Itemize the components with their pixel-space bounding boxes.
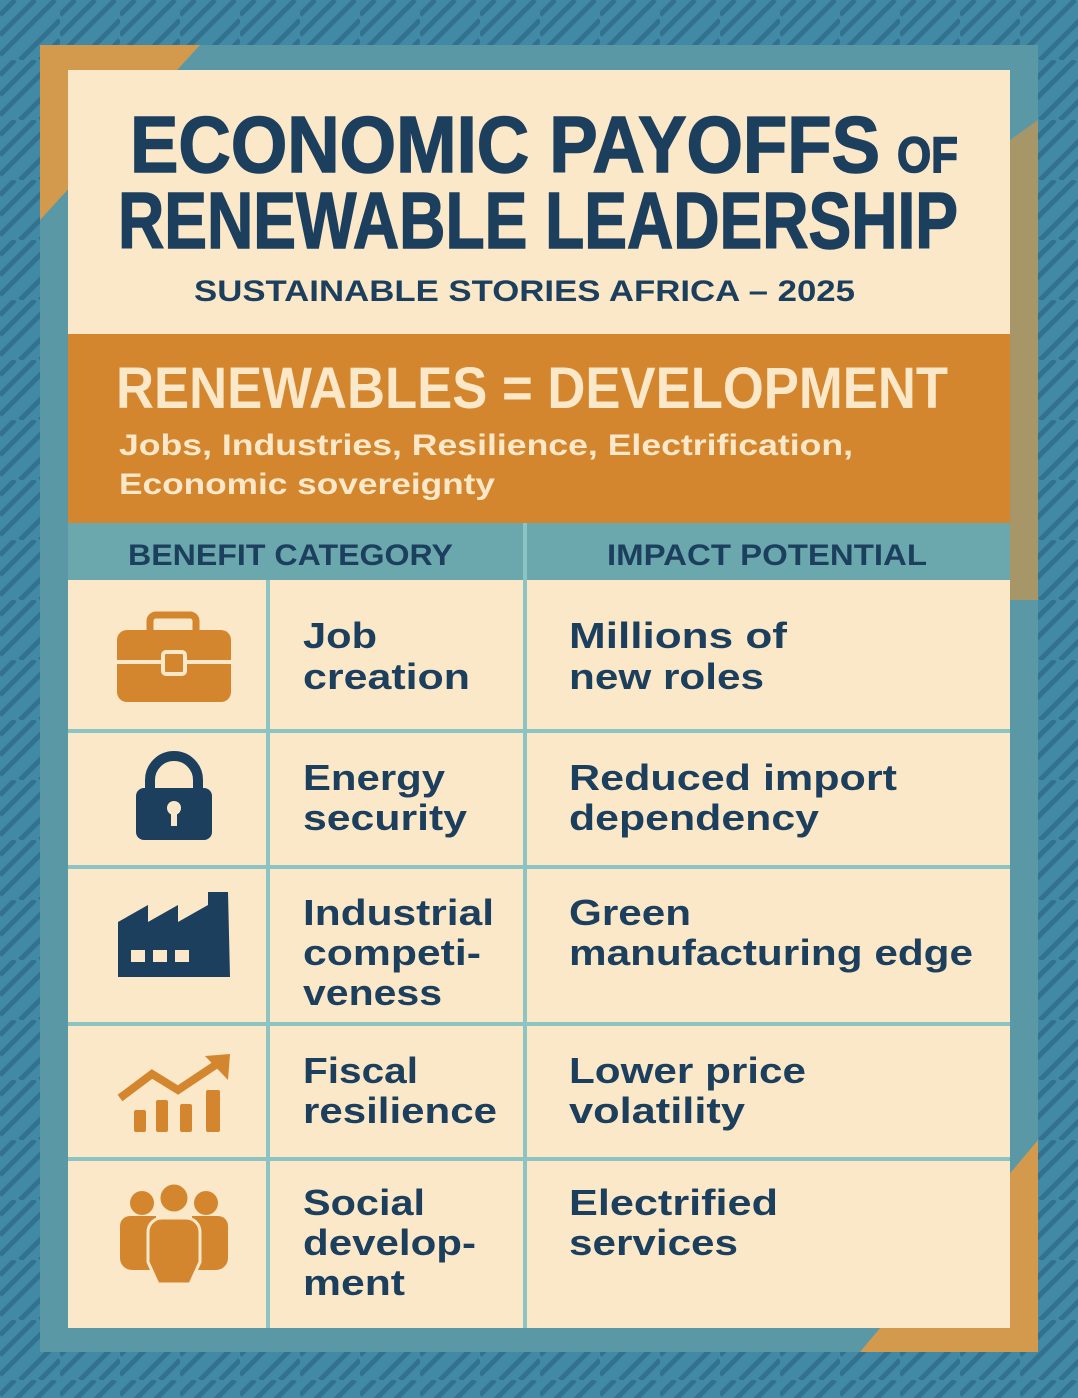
- title: OF: [897, 127, 958, 183]
- row: fiscal resilience: Fiscal: [303, 1050, 418, 1091]
- row: industrial competitiveness: veness: [303, 972, 442, 1013]
- row: social development: Electrified: [569, 1182, 778, 1223]
- row: social development: Social: [303, 1182, 425, 1223]
- title: ECONOMIC PAYOFFS: [130, 100, 880, 189]
- row: social development: ment: [303, 1262, 405, 1303]
- icon: growth chart: [120, 1054, 230, 1132]
- row: job creation: creation: [303, 656, 470, 697]
- row: industrial competitiveness: Industrial: [303, 892, 494, 933]
- row: industrial competitiveness: Green: [569, 892, 691, 933]
- row: job creation: Job: [303, 615, 377, 656]
- icon: factory: [118, 892, 230, 977]
- panel: renewables = development banner: RENEWABLES = DEVELOPMENT: [116, 356, 948, 421]
- row: fiscal resilience: resilience: [303, 1090, 497, 1131]
- table header: [68, 523, 1010, 580]
- row: fiscal resilience: [303, 1050, 806, 1131]
- panel: renewables = development banner: [68, 334, 1010, 523]
- row: industrial competitiveness: [303, 892, 973, 1013]
- row: energy security: Reduced import: [569, 757, 897, 798]
- subtitle: SUSTAINABLE STORIES AFRICA – 2025: [194, 275, 855, 308]
- panel: renewables = development banner: Economic sovereignty: [119, 468, 495, 501]
- panel: renewables = development banner: Jobs, Industries, Resilience, Electrification,: [119, 429, 853, 462]
- icon: padlock: [136, 756, 212, 840]
- title: [118, 100, 958, 265]
- row: industrial competitiveness: manufacturing edge: [569, 932, 973, 973]
- row: social development: [303, 1182, 778, 1303]
- row: energy security: [303, 757, 897, 838]
- row: industrial competitiveness: competi-: [303, 932, 481, 973]
- icon: people: [120, 1183, 228, 1284]
- row: social development: services: [569, 1222, 738, 1263]
- table header: IMPACT POTENTIAL: [607, 539, 927, 572]
- table header: BENEFIT CATEGORY: [128, 539, 453, 572]
- row: job creation: [303, 615, 788, 697]
- row: fiscal resilience: volatility: [569, 1090, 745, 1131]
- row: energy security: dependency: [569, 797, 819, 838]
- panel: title area: [68, 70, 1010, 334]
- row: energy security: Energy: [303, 757, 445, 798]
- row: fiscal resilience: Lower price: [569, 1050, 806, 1091]
- row: social development: develop-: [303, 1222, 476, 1263]
- row: job creation: new roles: [569, 656, 764, 697]
- icon: briefcase: [117, 615, 231, 702]
- row: job creation: Millions of: [569, 615, 788, 656]
- row: energy security: security: [303, 797, 467, 838]
- table body: [68, 523, 1010, 1328]
